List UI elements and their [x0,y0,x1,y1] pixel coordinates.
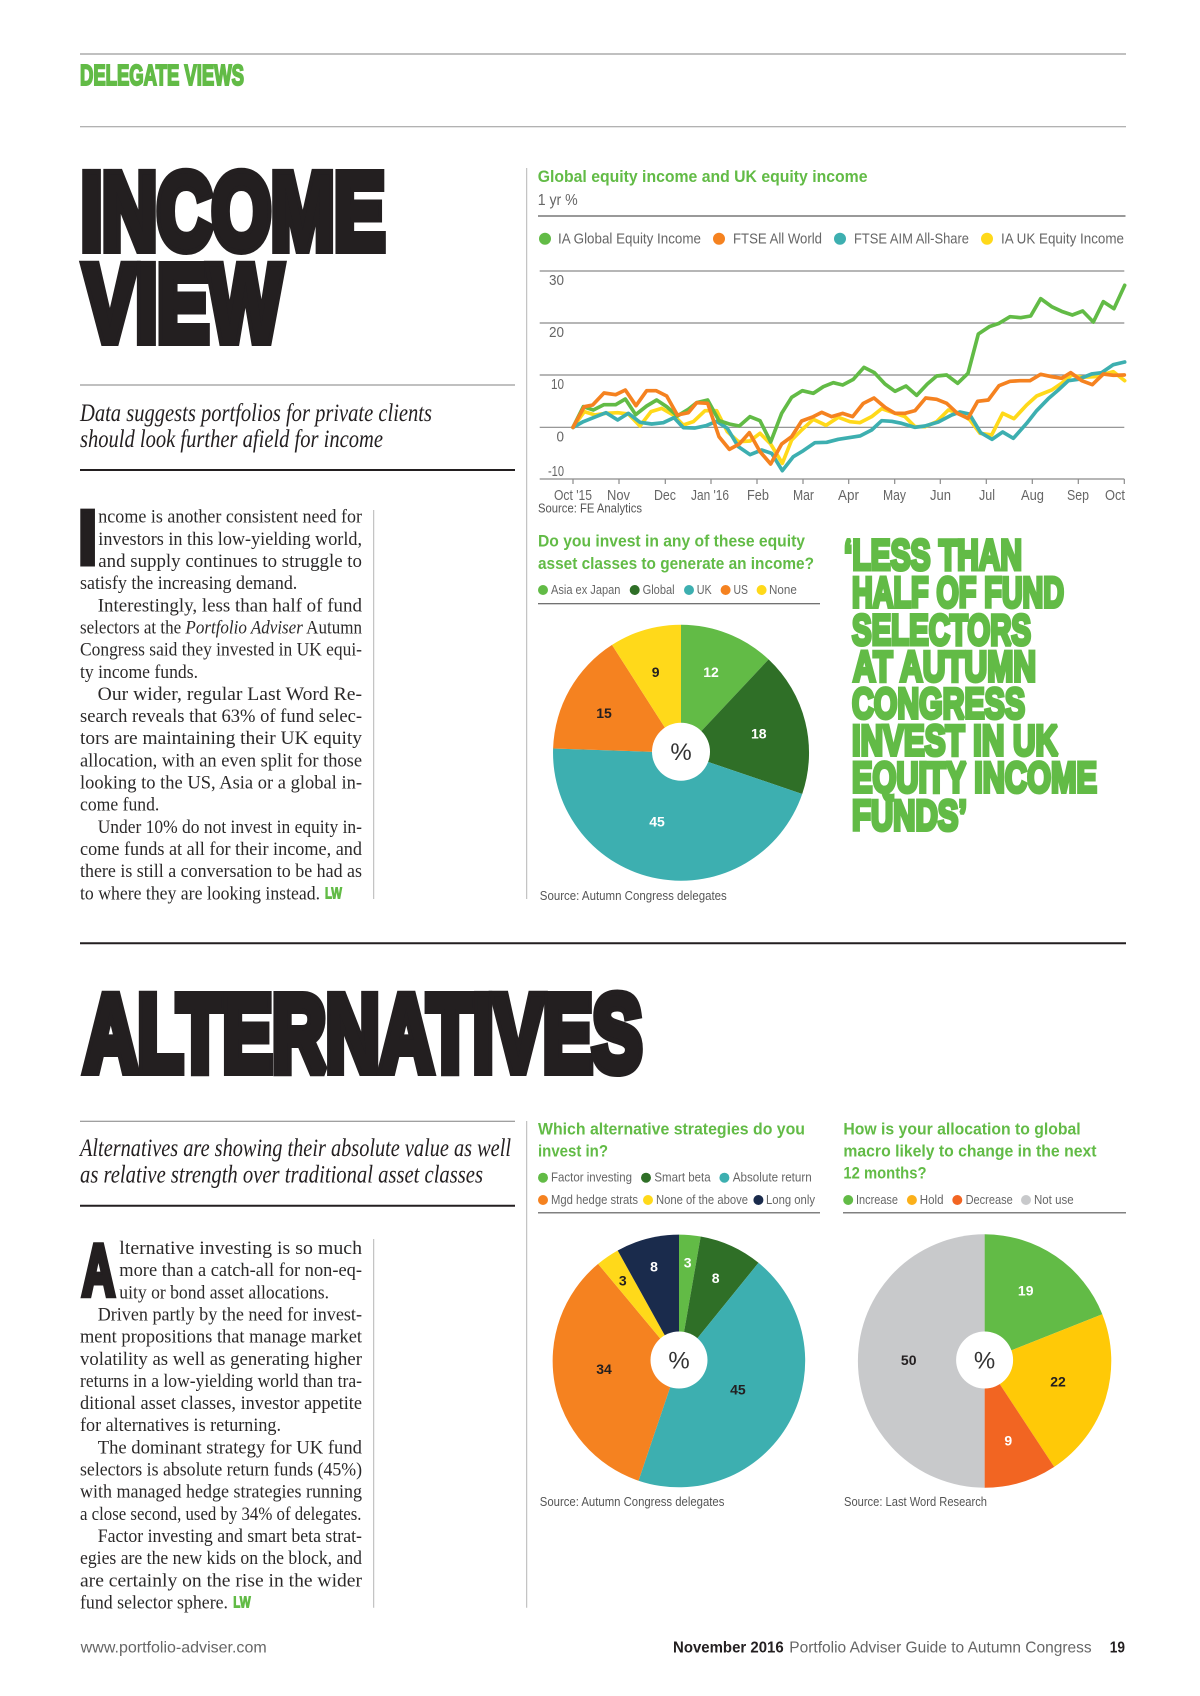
standfirst: income view: should look further afield for income [80,426,383,453]
body text: income view: and supply continues to struggle to [98,551,362,572]
pie title: asset classes to generate an income? [538,554,814,573]
body text: income view: investors in this low-yielding world, [98,529,362,550]
body text: income view: Our wider, regular Last Word Re- [98,684,362,705]
panel: line chart global equity income and UK equity income [538,167,1126,516]
pie chart [553,625,809,881]
x axis labels: Jan '16 [691,488,729,504]
pie chart [858,1234,1111,1488]
x axis labels: Jul [979,488,995,504]
pull quote: SELECTORS [852,607,1031,655]
y axis labels [548,273,564,480]
body text: income view: come funds at all for their income, and [80,839,362,860]
body text: income view: allocation, with an even split for those [80,750,362,771]
body text: alternatives: are certainly on the rise in the wider [80,1570,363,1591]
pull quote: ‘LESS THAN [844,532,1022,580]
body text: income view: there is still a conversation to be had as [80,861,362,882]
heading: alternatives: ALTERNATIVES [84,972,642,1094]
x axis labels: Dec [654,488,676,504]
pie legend: None of the above [656,1193,748,1207]
pie chart: % [670,739,692,766]
body text: alternatives: volatility as well as generating higher [80,1349,363,1370]
pie legend: Absolute return [733,1171,812,1185]
pull quote: AT AUTUMN [853,643,1036,691]
pie chart: % [974,1348,995,1374]
x axis labels: Aug [1021,488,1044,504]
pie chart: 8 [712,1270,720,1286]
body text: income view: search reveals that 63% of fund selec- [80,706,362,727]
panel: alternatives article [78,972,642,1613]
body text: alternatives: a close second, used by 34% of delegates. [80,1504,362,1525]
pie chart: 22 [1050,1374,1066,1390]
body text: income view: Interestingly, less than half of fund [98,595,362,616]
pie chart: 3 [619,1272,627,1288]
body text: alternatives: returns in a low-yielding world than tra- [80,1371,362,1392]
standfirst: alternatives [78,1135,511,1188]
body text: alternatives: ditional asset classes, investor appetite [80,1393,362,1414]
pie legend: Global [643,583,675,597]
pie chart: 50 [901,1352,917,1368]
pie source: Source: Last Word Research [844,1495,987,1509]
body text: income view: come fund. [80,795,159,816]
x axis labels: Apr [838,488,859,504]
body text: alternatives: A [82,1231,115,1311]
pie legend: US [734,583,748,597]
chart legend: FTSE All World [733,232,822,248]
heading: income view: VIEW [84,242,282,364]
x axis labels: Oct [1105,488,1125,504]
pie legend [538,1171,816,1207]
chart legend: FTSE AIM All-Share [854,232,969,248]
chart title: Global equity income and UK equity income [538,167,868,186]
y axis labels: 20 [549,325,564,341]
body text: income view: LW [325,886,343,902]
pie title [538,1119,805,1161]
footer: Portfolio Adviser Guide to Autumn Congress [789,1639,1092,1656]
panel: income view article [79,150,515,904]
pie legend: Asia ex Japan [551,583,620,597]
pie chart: 45 [649,814,665,830]
body text: alternatives: selectors is absolute return funds (45%) [80,1460,362,1480]
body text: income view: Congress said they invested in UK equi- [80,640,362,661]
pie chart: 9 [1004,1433,1012,1449]
panel: equity asset classes pie [538,532,820,903]
pie title: invest in? [538,1142,608,1161]
body text: alternatives: for alternatives is returning. [80,1415,281,1436]
body text: income view: satisfy the increasing demand. [80,573,297,594]
standfirst: income view: Data suggests portfolios for private clients [79,400,432,427]
data lines [573,285,1125,471]
pie legend: None [769,583,797,597]
y axis labels: -10 [548,464,564,480]
body text: alternatives: LW [233,1594,251,1612]
x axis labels: Jun [930,488,951,504]
pie legend [843,1193,1074,1207]
body text: alternatives [80,1231,363,1613]
panel: global macro allocation pie [843,1119,1126,1509]
panel: alternative strategies pie [538,1119,820,1509]
body text: income view: selectors at the Portfolio Adviser Autumn [80,618,362,638]
pie title: Do you invest in any of these equity [538,532,805,551]
pie chart [553,1235,805,1487]
footer: November 2016 [673,1639,784,1656]
pie legend: Increase [856,1193,898,1207]
pie title: How is your allocation to global [843,1119,1081,1138]
pie chart: 34 [596,1361,612,1377]
pie legend: Long only [766,1193,816,1207]
line: FTSE All World [573,373,1124,464]
body text: alternatives: Driven partly by the need for invest- [98,1304,362,1326]
pull quote: EQUITY INCOME [852,754,1097,802]
pie source: Source: Autumn Congress delegates [540,889,727,903]
body text: alternatives: with managed hedge strategies running [80,1482,362,1503]
pie title [843,1119,1097,1182]
body text: alternatives: more than a catch-all for non-eq- [119,1260,362,1281]
x axis labels: Feb [747,488,769,504]
pie title: Which alternative strategies do you [538,1119,805,1138]
pie chart: 8 [650,1259,658,1275]
pie chart: 9 [652,664,660,680]
pie legend: Not use [1034,1193,1074,1207]
y axis labels: 10 [551,377,564,393]
body text: income view [80,499,363,904]
pie chart: 45 [730,1382,746,1398]
body text: income view: tors are maintaining their UK equity [80,728,362,749]
body text: alternatives: egies are the new kids on the block, and [80,1548,362,1569]
standfirst: alternatives: as relative strength over traditional asset classes [80,1161,483,1188]
x axis labels [554,488,1125,504]
pie legend: Factor investing [551,1171,632,1185]
line: FTSE AIM All-Share [573,362,1125,471]
pie chart: 15 [596,705,612,721]
body text: income view: ncome is another consistent need for [98,507,363,528]
pie chart: 18 [751,726,767,742]
body text: alternatives: Factor investing and smart beta strat- [98,1526,362,1547]
pie chart: 3 [684,1255,692,1271]
body text: income view: ty income funds. [80,662,198,683]
standfirst: income view [79,400,432,453]
pie legend: Hold [920,1193,944,1207]
heading: income view: INCOME [81,150,385,272]
pie chart: 12 [703,664,719,680]
body text: alternatives: The dominant strategy for UK fund [98,1437,362,1458]
pull quote: CONGRESS [852,680,1025,728]
heading: income view [81,150,385,364]
pie legend: Smart beta [654,1171,711,1185]
chart legend [539,232,1124,248]
body text: income view: looking to the US, Asia or a global in- [80,772,362,794]
body text: alternatives: uity or bond asset allocations. [119,1282,329,1303]
chart legend: IA UK Equity Income [1001,232,1124,248]
pie legend [538,583,797,597]
pie title: macro likely to change in the next [843,1142,1097,1161]
chart subtitle: 1 yr % [538,192,578,209]
body text: income view: Under 10% do not invest in equity in- [98,817,362,838]
pie legend: Mgd hedge strats [551,1193,638,1207]
pie source: Source: Autumn Congress delegates [540,1495,724,1509]
footer: www.portfolio-adviser.com [80,1639,267,1656]
body text: alternatives: fund selector sphere. [80,1592,228,1613]
pie chart: 19 [1018,1283,1034,1299]
chart legend: IA Global Equity Income [558,232,701,248]
pull quote [844,532,1097,840]
footer: 19 [1110,1639,1125,1656]
pull quote: FUNDS’ [852,792,967,840]
pie legend: UK [697,583,712,597]
x axis labels: May [883,488,907,504]
pull quote: INVEST IN UK [852,717,1058,765]
pie chart: % [668,1348,690,1374]
x axis labels: Sep [1067,488,1089,504]
pull quote: HALF OF FUND [852,569,1064,617]
footer [80,1639,1125,1656]
body text: income view: I [80,499,96,579]
x axis labels: Oct '15 [554,488,592,504]
body text: alternatives: lternative investing is so much [119,1238,363,1259]
x axis labels: Mar [793,488,814,504]
standfirst: alternatives: Alternatives are showing their absolute value as well [78,1135,511,1162]
section label: delegate views: DELEGATE VIEWS [80,60,244,92]
x axis labels: Nov [607,488,631,504]
pie title [538,532,814,573]
line: IA UK Equity Income [573,372,1125,463]
y axis labels: 0 [556,430,564,446]
y axis labels: 30 [549,273,564,289]
pie legend: Decrease [966,1193,1013,1207]
pie title: 12 months? [843,1163,926,1182]
body text: income view: to where they are looking instead. [80,883,320,904]
body text: alternatives: ment propositions that manage market [80,1327,363,1348]
line: IA Global Equity Income [573,285,1125,442]
chart source: Source: FE Analytics [538,502,642,516]
